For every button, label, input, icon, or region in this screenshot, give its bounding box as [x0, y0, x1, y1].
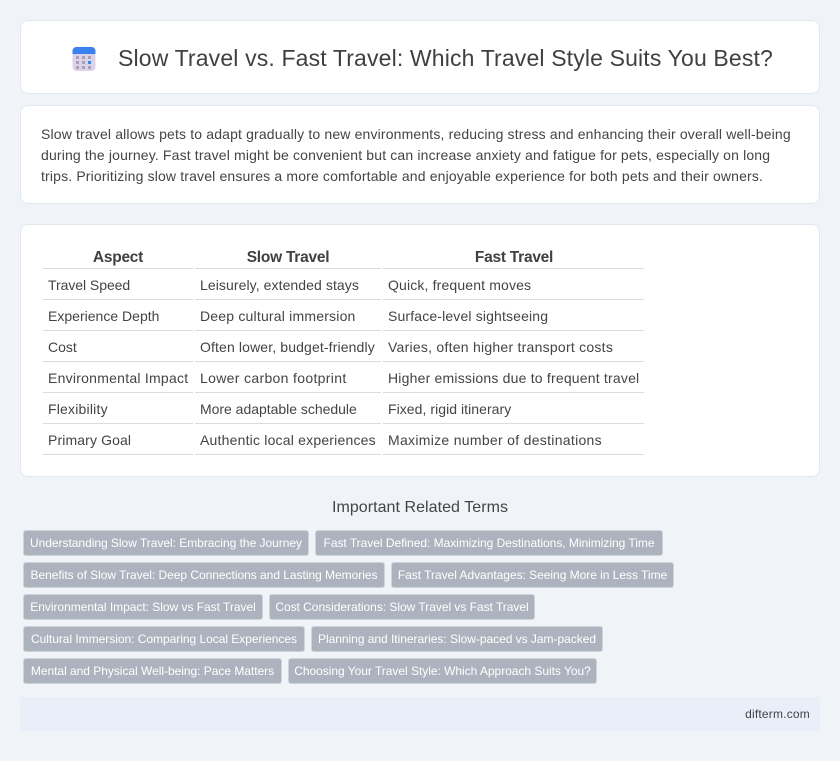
row: primary goal: Authentic local experiences: [200, 432, 376, 448]
tag: [288, 658, 597, 684]
tag: Benefits of Slow Travel: Deep Connections and Lasting Memories: [30, 568, 378, 582]
row: environmental impact: Environmental Impact: [48, 370, 188, 386]
row: travel speed: Quick, frequent moves: [388, 277, 531, 293]
row: cost: [48, 339, 613, 355]
header row: [93, 249, 553, 266]
header row: Slow Travel: [247, 249, 329, 266]
row: cost: Varies, often higher transport costs: [388, 339, 613, 355]
intro text: Slow travel allows pets to adapt gradually to new environments, reducing stress and enhancing their overall well-being: [41, 126, 791, 142]
tag: [269, 594, 535, 620]
row: travel speed: [48, 277, 531, 293]
row: experience depth: Experience Depth: [48, 308, 159, 324]
row: primary goal: Maximize number of destinations: [388, 432, 602, 448]
tag: Cost Considerations: Slow Travel vs Fast Travel: [275, 600, 529, 614]
tag: Choosing Your Travel Style: Which Approach Suits You?: [294, 664, 591, 678]
footer bar: [20, 697, 820, 731]
tag: [23, 658, 282, 684]
row: experience depth: Surface-level sightseeing: [388, 308, 548, 324]
row: experience depth: Deep cultural immersion: [200, 308, 356, 324]
intro text: trips. Prioritizing slow travel ensures a more comfortable and enjoyable experience for both pets and their owners.: [41, 168, 763, 184]
row: environmental impact: [48, 370, 639, 386]
row: flexibility: More adaptable schedule: [200, 401, 357, 417]
header panel: [20, 20, 820, 94]
tag: [23, 594, 263, 620]
header row: Aspect: [93, 249, 143, 266]
icon: calendar: [72, 47, 96, 71]
row: primary goal: [48, 432, 602, 448]
intro text: during the journey. Fast travel might be convenient but can increase anxiety and fatigue for pets, especially on long: [41, 147, 770, 163]
tag: Environmental Impact: Slow vs Fast Travel: [30, 600, 256, 614]
tag: [23, 530, 309, 556]
row: environmental impact: Lower carbon footprint: [200, 370, 347, 386]
tag: Mental and Physical Well-being: Pace Matters: [31, 664, 274, 678]
tag: [315, 530, 663, 556]
row: travel speed: Travel Speed: [48, 277, 130, 293]
related terms tags: [23, 530, 674, 684]
row: experience depth: [48, 308, 548, 324]
intro text: [41, 126, 791, 184]
row: flexibility: [48, 401, 512, 417]
footer source: difterm.com: [745, 707, 810, 721]
comparison table: [43, 249, 644, 455]
tag: Fast Travel Defined: Maximizing Destinations, Minimizing Time: [324, 536, 654, 550]
row: flexibility: Flexibility: [48, 401, 108, 417]
related terms heading: Important Related Terms: [332, 499, 508, 516]
row: primary goal: Primary Goal: [48, 432, 131, 448]
tag: Fast Travel Advantages: Seeing More in Less Time: [398, 568, 667, 582]
tag: [311, 626, 603, 652]
tag: Cultural Immersion: Comparing Local Experiences: [31, 632, 297, 646]
row: cost: Cost: [48, 339, 77, 355]
title: Slow Travel vs. Fast Travel: Which Travel Style Suits You Best?: [118, 45, 773, 71]
tag: [23, 626, 305, 652]
intro text panel: [20, 105, 820, 204]
comparison table panel: [20, 224, 820, 477]
header row: Fast Travel: [475, 249, 553, 266]
row: travel speed: Leisurely, extended stays: [200, 277, 359, 293]
tag: Planning and Itineraries: Slow-paced vs Jam-packed: [318, 632, 596, 646]
row: flexibility: Fixed, rigid itinerary: [388, 401, 511, 417]
tag: Understanding Slow Travel: Embracing the Journey: [30, 536, 302, 550]
tag: [23, 562, 385, 588]
tag: [391, 562, 674, 588]
row: cost: Often lower, budget-friendly: [200, 339, 375, 355]
row: environmental impact: Higher emissions due to frequent travel: [388, 370, 639, 386]
